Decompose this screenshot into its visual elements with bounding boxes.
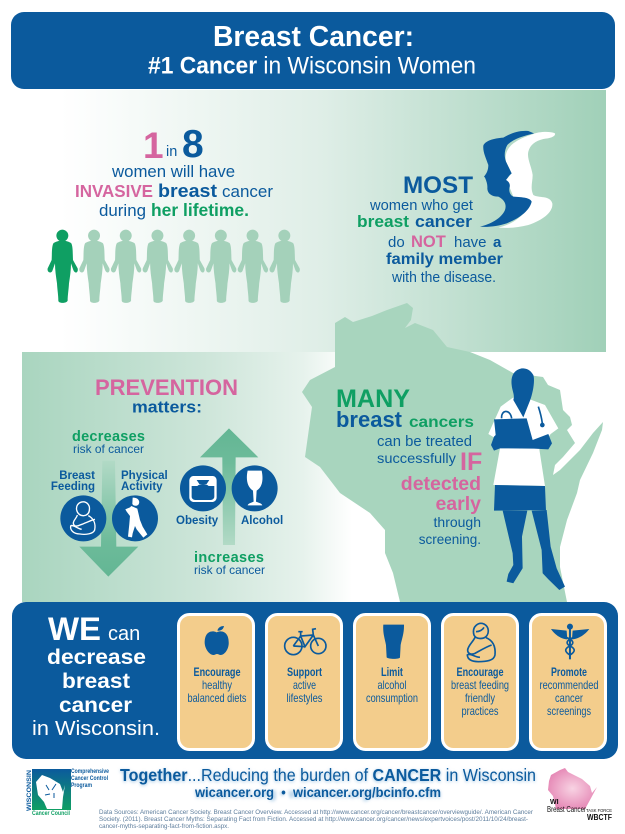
text block: prevention matters: matters: <box>132 398 202 416</box>
tagline: wicancer.org • wicancer.org/bcinfo.cfm <box>194 786 441 801</box>
text block: many breast cancers: screening. <box>419 532 481 547</box>
card: cancer screenings: screenings <box>547 704 591 718</box>
legs <box>503 510 565 590</box>
tagline <box>120 765 536 801</box>
labels: increases risk: risk of cancer <box>194 563 265 577</box>
icon: mother and child <box>467 623 495 662</box>
icon: wine glass <box>232 465 278 511</box>
icon: bicycle <box>285 629 326 655</box>
logo: Wisconsin Comprehensive Cancer Control Program: WISCONSIN <box>27 770 33 811</box>
text block: most women: NOT <box>411 233 446 251</box>
text block: most women: MOST <box>403 172 473 199</box>
text block: many breast cancers: successfully <box>377 450 456 466</box>
white coat <box>488 397 558 486</box>
data sources: cancer-myths-separating-fact-from-fiction.aspx. <box>99 824 229 830</box>
text block: most women: with the disease. <box>391 270 496 286</box>
card: cancer screenings <box>530 614 606 750</box>
tagline: Together...Reducing the burden of CANCER in Wisconsin <box>120 765 536 785</box>
card: breast feeding: breast feeding <box>451 678 509 692</box>
text block: we can decrease: in Wisconsin. <box>32 718 160 740</box>
card: healthy diets: balanced diets <box>188 691 246 705</box>
panel: we can decrease <box>12 602 618 759</box>
text block: we can decrease: can <box>108 623 140 645</box>
map of Wisconsin <box>302 303 603 602</box>
text block: most women: cancer <box>415 212 472 231</box>
labels: decreases risk: risk of cancer <box>73 442 144 456</box>
text block: most women: breast <box>357 212 409 231</box>
skirt <box>494 485 546 511</box>
logo: WI Breast Cancer Task Force <box>547 768 612 822</box>
logo: WI Breast Cancer Task Force: Breast Cancer <box>547 804 586 814</box>
text block: many breast cancers: breast <box>336 407 403 432</box>
clipboard and arms <box>491 418 552 451</box>
labels: decreases risk <box>51 429 168 493</box>
text block: many breast cancers <box>336 385 482 547</box>
stethoscope <box>502 407 542 423</box>
card: limit alcohol: alcohol <box>378 678 406 692</box>
text block: many breast cancers: cancers <box>409 414 474 431</box>
text block: most women: do <box>388 234 405 251</box>
text block: 1 in 8: breast <box>158 181 217 201</box>
data sources: Data Sources: American Cancer Society. Breast Cancer Overview. Accessed at http://www.cancer.org/cancer/breastcancer/overviewguide/. American Cancer <box>99 810 533 816</box>
card: limit alcohol: consumption <box>366 691 418 705</box>
text block: most women <box>357 172 503 286</box>
text block: we can decrease: decrease <box>47 646 146 669</box>
upper body <box>488 368 558 486</box>
text block: most women: a <box>493 234 502 251</box>
text block: 1 in 8: INVASIVE <box>75 181 153 201</box>
data sources <box>99 810 533 830</box>
text block: 1 in 8: women will have <box>111 162 235 181</box>
card: breast feeding: Encourage <box>456 665 504 679</box>
text block: many breast cancers: can be treated <box>377 434 472 450</box>
icon: scale <box>180 465 226 511</box>
card: healthy diets: healthy <box>202 678 232 692</box>
text block: 1 in 8: cancer <box>222 182 273 201</box>
card: cancer screenings: cancer <box>555 691 583 705</box>
text block: many breast cancers: IF <box>460 448 482 476</box>
card: breast feeding: practices <box>462 704 498 718</box>
title: Breast Cancer: <box>213 21 414 53</box>
text block: 1 in 8: during <box>99 202 146 220</box>
text block: most women: women who get <box>369 197 474 214</box>
subtitle: #1 Cancer in Wisconsin Women <box>148 52 476 80</box>
arrow: decreases (down) <box>79 461 138 577</box>
labels: increases risk <box>176 515 283 577</box>
panel: statistics background <box>0 90 606 352</box>
icon: breast feeding <box>60 495 106 541</box>
panel: prevention background <box>22 352 352 602</box>
text block: prevention matters <box>95 375 238 416</box>
labels: increases risk: Alcohol <box>241 515 283 527</box>
text block: we can decrease <box>32 611 160 740</box>
text block: most women: have <box>454 234 487 251</box>
logo: Wisconsin Comprehensive Cancer Control Program: Comprehensive <box>71 769 110 775</box>
card: cancer screenings: Promote <box>551 665 587 679</box>
icon: beer glass <box>383 625 404 659</box>
head and neck <box>511 368 534 417</box>
text block: many breast cancers: MANY <box>336 385 410 413</box>
logo: WI Breast Cancer Task Force: WBCTF <box>587 813 612 822</box>
text block: we can decrease: cancer <box>59 694 132 717</box>
text block: many breast cancers: detected <box>401 473 481 495</box>
icon: physical activity <box>112 495 158 541</box>
text block: many breast cancers: through <box>434 514 481 530</box>
card: breast feeding <box>442 614 518 750</box>
logo: Wisconsin Comprehensive Cancer Control Program <box>27 769 110 817</box>
labels: decreases risk: Breast <box>59 470 95 482</box>
card: limit alcohol: Limit <box>381 665 403 679</box>
prevention graphics <box>60 428 278 577</box>
labels: decreases risk: Feeding <box>51 481 95 493</box>
text block: prevention matters: PREVENTION <box>95 375 238 400</box>
tagline: wicancer.org • wicancer.org/bcinfo.cfm <box>194 785 441 800</box>
text block: 1 in 8: in <box>166 144 177 160</box>
text block: 1 in 8: 8 <box>182 123 204 166</box>
lower body <box>494 485 565 590</box>
header banner <box>11 12 615 89</box>
labels: decreases risk: decreases <box>72 429 145 445</box>
card: healthy diets: Encourage <box>194 665 241 679</box>
text block: we can decrease: breast <box>62 670 130 693</box>
card: healthy diets <box>178 614 254 750</box>
text block: 1 in 8: 1 <box>143 125 164 166</box>
card: active lifestyles: active <box>293 678 316 692</box>
text block: we can decrease: WE <box>48 611 101 647</box>
text block: 1 in 8: her lifetime. <box>151 200 249 220</box>
card: breast feeding: friendly <box>465 691 495 705</box>
logo: Wisconsin Comprehensive Cancer Control Program: Cancer Council <box>32 810 70 817</box>
data sources: Society. (2011). Breast Cancer Myths: Separating Fact from Fiction. Accessed at http://www.cancer.org/cancer/news/expertvoices/post/2011/10/24/breast- <box>99 817 528 823</box>
arrow: increases (up) <box>200 428 258 545</box>
pictogram: one in eight women <box>48 230 300 303</box>
logo: Wisconsin Comprehensive Cancer Control Program: Program <box>71 783 92 789</box>
labels: increases risk: increases <box>194 550 264 566</box>
logo: Wisconsin Comprehensive Cancer Control Program: Cancer Control <box>71 776 108 782</box>
tagline: Together...Reducing the burden of CANCER in Wisconsin <box>120 766 536 786</box>
card: active lifestyles <box>266 614 342 750</box>
icon: two face profiles <box>480 131 555 228</box>
illustration: nurse <box>488 368 565 590</box>
labels: increases risk: Obesity <box>176 515 219 527</box>
text block: 1 in 8 <box>75 123 273 220</box>
icon: apple <box>205 626 229 655</box>
logo: WI Breast Cancer Task Force: WI <box>550 799 559 806</box>
icon: caduceus <box>551 624 589 659</box>
text block: many breast cancers: early <box>435 493 481 515</box>
text block: most women: family member <box>386 251 503 268</box>
card: cancer screenings: recommended <box>540 678 598 692</box>
labels: decreases risk: Physical <box>121 470 168 482</box>
logo: WI Breast Cancer Task Force: TASK FORCE <box>586 808 612 813</box>
card: active lifestyles: lifestyles <box>286 691 322 705</box>
labels: decreases risk: Activity <box>121 481 163 493</box>
card: limit alcohol <box>354 614 430 750</box>
card: active lifestyles: Support <box>287 665 322 679</box>
